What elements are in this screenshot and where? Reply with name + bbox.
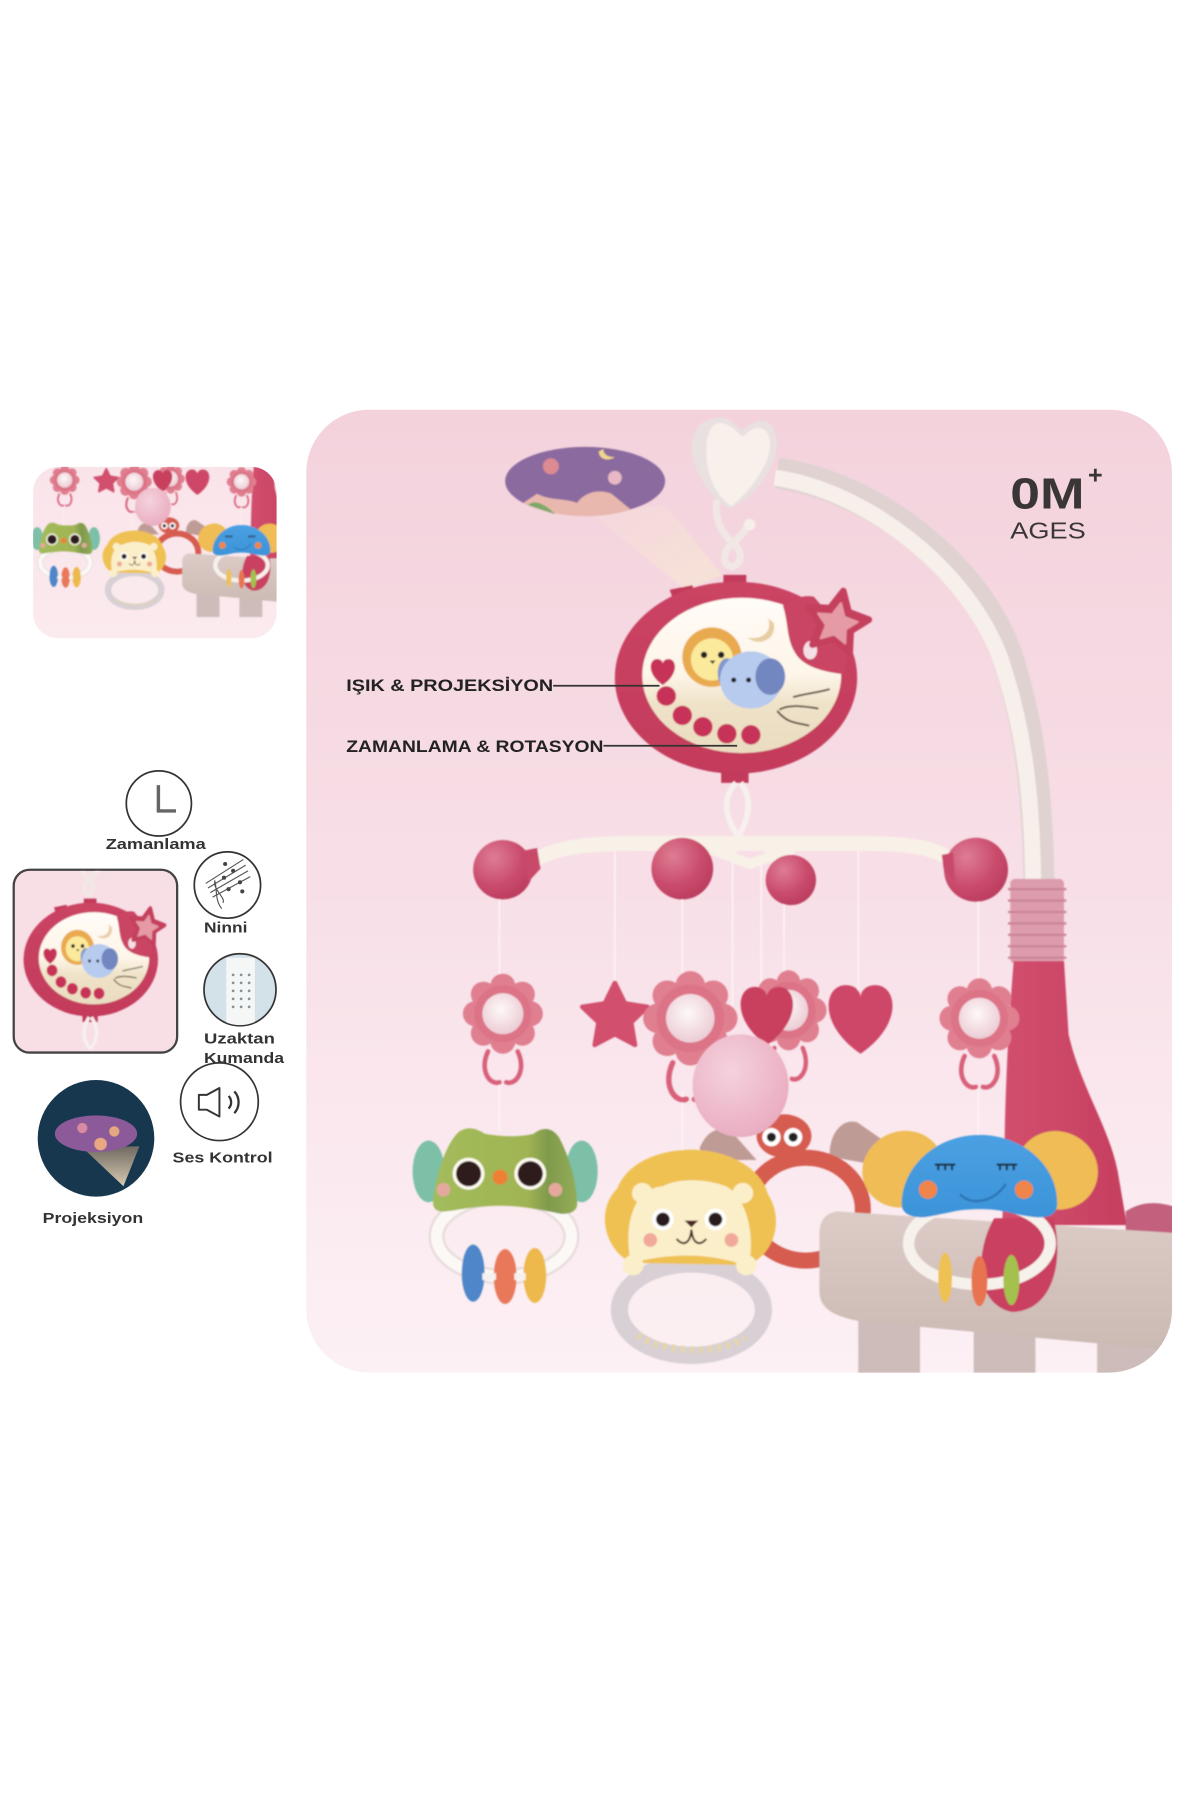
label: projection: Projeksiyon — [43, 1211, 143, 1227]
rotating arm — [536, 841, 943, 864]
main product panel — [306, 410, 1177, 1383]
label: remote control — [204, 1031, 285, 1067]
link below unit — [727, 783, 748, 837]
icon: lullaby music — [194, 852, 261, 918]
icon: speaker — [181, 1063, 258, 1141]
age badge: + — [1088, 461, 1103, 489]
callout: light and projection: IŞIK & PROJEKSİYON — [346, 677, 553, 695]
panel contents — [413, 417, 1177, 1383]
age badge: AGES — [1010, 517, 1086, 543]
age badge: 0M — [1010, 471, 1085, 519]
label: remote control: Uzaktan — [204, 1031, 275, 1047]
label: timer: Zamanlama — [106, 837, 207, 853]
label: remote control: Kumanda — [204, 1051, 285, 1067]
projector unit — [615, 503, 874, 783]
lower mobile — [413, 848, 1177, 1383]
label: lullaby: Ninni — [204, 921, 247, 937]
callout: timer and rotation: ZAMANLAMA & ROTASYON — [346, 738, 603, 756]
arm balls — [473, 838, 1008, 905]
icon: clock — [126, 771, 191, 836]
thumbnail card: projector unit — [14, 856, 177, 1053]
projection beam — [660, 542, 720, 588]
thumbnail card: rattles — [33, 466, 277, 638]
icon: projection — [38, 1080, 154, 1197]
label: volume control: Ses Kontrol — [173, 1150, 273, 1166]
projected image — [505, 447, 665, 516]
heart clip — [691, 417, 777, 509]
mobile arm — [775, 473, 1039, 882]
icon: remote control — [204, 954, 276, 1026]
age badge — [1010, 461, 1103, 543]
